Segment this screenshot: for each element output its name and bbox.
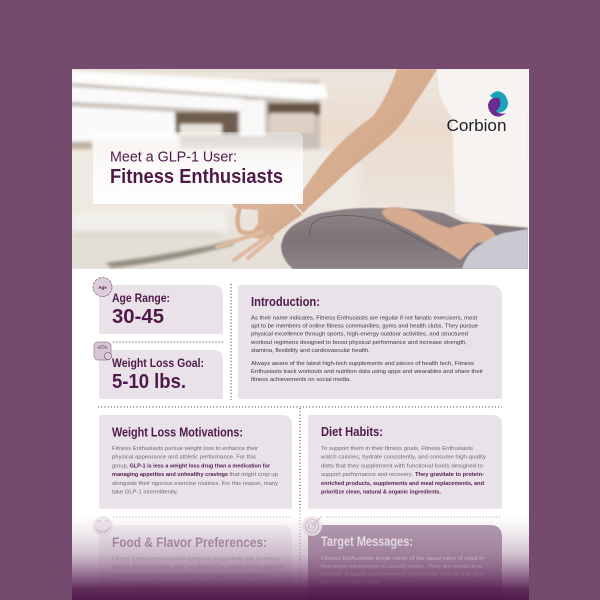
target body: that more information is usually better. They are meticulous bbox=[321, 564, 483, 570]
motivations body: group, bbox=[112, 463, 129, 469]
introduction paragraph one: physical excellence through sports, high-energy outdoor activities, and structured bbox=[251, 332, 468, 338]
hero kicker: Meet a GLP-1 User: bbox=[110, 148, 237, 166]
panel: introduction bbox=[238, 285, 502, 399]
panel: weight loss goal bbox=[99, 350, 223, 399]
introduction paragraph one: apt to be members of online fitness communities, gyms and health clubs. They pursue bbox=[251, 324, 478, 330]
motivations body: GLP-1 is less a weight loss drug than a medication for bbox=[130, 463, 271, 469]
bottom fade overlay bbox=[72, 505, 529, 600]
icon: smiling face bbox=[93, 516, 113, 536]
age value: 30-45 bbox=[112, 306, 164, 328]
target body: them what they want. bbox=[321, 580, 381, 586]
logo mark bbox=[488, 91, 508, 117]
food body bbox=[112, 557, 282, 579]
motivations body: take GLP-1 intermittently. bbox=[112, 490, 178, 496]
introduction paragraph two: fitness achievements on social media. bbox=[251, 377, 351, 383]
panel: food and flavor preferences bbox=[99, 525, 292, 600]
diet body: They gravitate to protein- bbox=[415, 472, 484, 478]
target body: readers of labels and extremely loyal to the brands that give bbox=[321, 572, 484, 578]
motivations heading: Weight Loss Motivations: bbox=[112, 424, 243, 440]
motivations body: that might crop up bbox=[230, 472, 278, 478]
motivations body: Fitness Enthusiasts pursue weight loss to enhance their bbox=[112, 446, 258, 452]
motivations body: alongside their rigorous exercise routines. For this reason, many bbox=[112, 481, 278, 487]
target heading: Target Messages: bbox=[321, 534, 413, 549]
panel: diet habits bbox=[308, 415, 502, 509]
arm and hand bbox=[217, 69, 437, 260]
diet body: enriched products, supplements and meal replacements, and bbox=[321, 481, 485, 487]
introduction paragraph two: Always aware of the latest high-tech supplements and pieces of health tech, Fitness bbox=[251, 361, 474, 367]
diet body: watch calories, hydrate consistently, and consume high-quality bbox=[320, 455, 486, 461]
target body: Fitness Enthusiasts break some of the usual rules of retail in bbox=[321, 556, 484, 562]
diet body bbox=[320, 446, 486, 496]
motivations body bbox=[112, 446, 278, 496]
food body: of various sizes featuring nutrients that support their routines. bbox=[112, 573, 267, 579]
introduction paragraph two: Enthusiasts track workouts and nutrition data using apps and wearables and share their bbox=[251, 369, 483, 375]
motivations body: managing appetites and unhealthy cravings bbox=[112, 472, 228, 478]
legs bbox=[281, 208, 528, 269]
icon: target with arrow bbox=[302, 516, 322, 536]
introduction paragraph one: stamina, flexibility and cardiovascular health. bbox=[251, 348, 370, 354]
icon: age: Age bbox=[98, 285, 107, 290]
introduction paragraph one: As their name indicates, Fitness Enthusiasts are regular if not fanatic exercisers, most bbox=[251, 316, 477, 322]
introduction paragraph two bbox=[251, 361, 483, 383]
lower light leg bbox=[462, 229, 528, 269]
hero title card bbox=[93, 132, 303, 204]
food body: snacks. For this reason, they are attracted by single-serving options bbox=[112, 565, 282, 571]
hero photo: seated yoga pose bbox=[60, 60, 540, 269]
goal value: 5-10 lbs. bbox=[112, 371, 186, 393]
motivations body: physical appearance and athletic performance. For this bbox=[112, 455, 256, 461]
foot bbox=[382, 207, 497, 260]
food bullet list: Snacks bbox=[137, 584, 157, 590]
food body: Fitness Enthusiasts consume numerous small meals and on-the-go bbox=[112, 557, 280, 563]
diet heading: Diet Habits: bbox=[321, 424, 383, 439]
introduction paragraph one: workout regimens designed to boost physical performance and increase strength, bbox=[250, 340, 467, 346]
diet body: diets that they supplement with functional foods designed to bbox=[321, 463, 483, 469]
icon: bathroom scale bbox=[94, 342, 112, 360]
panel: weight loss motivations bbox=[99, 415, 292, 509]
target body bbox=[321, 556, 484, 586]
panel: target messages bbox=[308, 525, 502, 600]
diet body: To support them in their fitness goals, Fitness Enthusiasts bbox=[321, 446, 473, 452]
food heading: Food & Flavor Preferences: bbox=[112, 534, 267, 550]
logo wordmark: Corbion bbox=[446, 116, 506, 135]
icon: age bbox=[93, 278, 112, 296]
goal heading: Weight Loss Goal: bbox=[112, 356, 204, 370]
diet body: prioritize clean, natural & organic ingredients. bbox=[321, 490, 441, 496]
age heading: Age Range: bbox=[112, 291, 170, 305]
corbion logo bbox=[446, 91, 508, 135]
torso shirt bbox=[437, 69, 528, 226]
diet body: support performance and recovery. bbox=[321, 472, 413, 478]
introduction heading: Introduction: bbox=[251, 294, 320, 309]
hero title: Fitness Enthusiasts bbox=[110, 166, 283, 188]
page sheet bbox=[72, 69, 529, 600]
panel: age range bbox=[99, 285, 223, 334]
introduction paragraph one bbox=[250, 316, 478, 354]
